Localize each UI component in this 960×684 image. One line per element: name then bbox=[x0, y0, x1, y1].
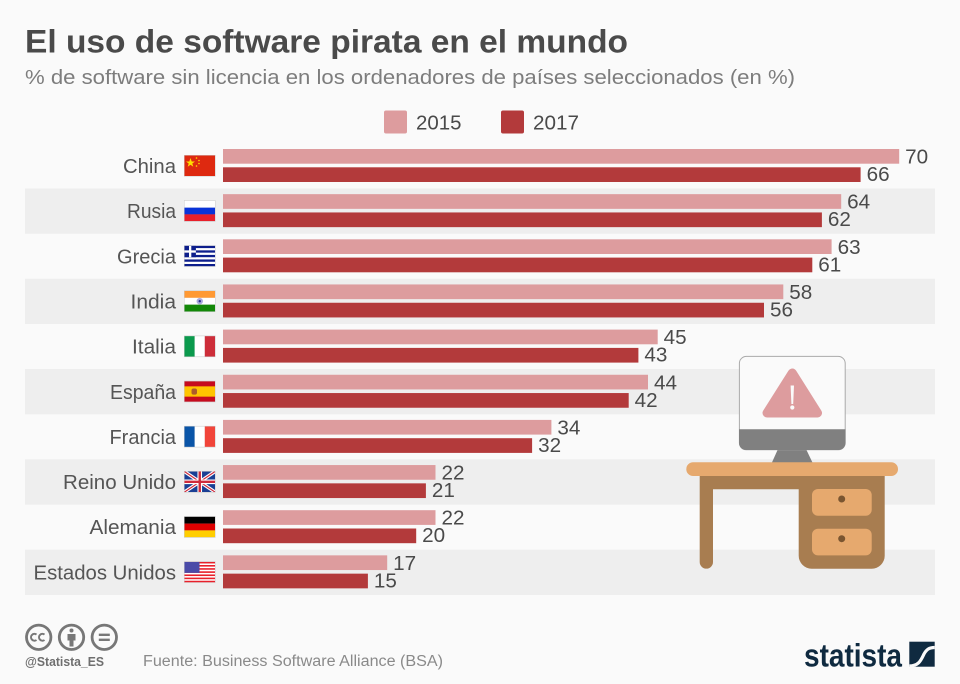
row: Italia: 43 bbox=[644, 345, 667, 367]
legend bbox=[384, 110, 579, 134]
row: India bbox=[25, 279, 935, 324]
row: Italia: 45 bbox=[664, 327, 687, 349]
row: Francia: 32 bbox=[538, 435, 561, 457]
row: Estados Unidos: 17 bbox=[393, 553, 416, 575]
row: Francia: Francia bbox=[110, 427, 177, 449]
legend: 2017 bbox=[533, 112, 579, 134]
row: Rusia bbox=[25, 188, 935, 234]
row: Italia: Italia bbox=[132, 337, 177, 359]
desk body bbox=[700, 476, 885, 569]
row: Grecia: 63 bbox=[838, 237, 861, 259]
row: India: 56 bbox=[770, 299, 793, 321]
row: Estados Unidos: Estados Unidos bbox=[34, 562, 176, 584]
drawer: lower bbox=[812, 529, 872, 555]
row: España: 44 bbox=[654, 372, 677, 394]
row: Francia bbox=[110, 417, 580, 457]
drawer: upper bbox=[812, 489, 872, 516]
row: Reino Unido: Reino Unido bbox=[63, 472, 176, 494]
monitor stand bbox=[772, 449, 813, 463]
row: India: 58 bbox=[789, 282, 812, 304]
row: India: India bbox=[130, 291, 177, 313]
row: Rusia: Rusia bbox=[127, 201, 177, 223]
row: Grecia: Grecia bbox=[117, 246, 177, 268]
desk top bbox=[686, 462, 898, 476]
row: Rusia: 64 bbox=[847, 192, 870, 214]
row: Francia: 34 bbox=[557, 417, 580, 439]
source: Fuente: Business Software Alliance (BSA) bbox=[143, 653, 443, 670]
title: El uso de software pirata en el mundo bbox=[25, 24, 628, 60]
handle: @Statista_ES bbox=[25, 655, 104, 669]
row: Grecia bbox=[117, 237, 861, 276]
row: China: 70 bbox=[905, 146, 928, 168]
icons: creative commons licence bbox=[26, 625, 117, 650]
legend: 2015 bbox=[416, 112, 462, 134]
row: Reino Unido: 21 bbox=[432, 480, 455, 502]
subtitle: % de software sin licencia en los ordenadores de países seleccionados (en %) bbox=[25, 66, 795, 89]
row: China bbox=[123, 146, 928, 186]
row: Rusia: 62 bbox=[828, 209, 851, 231]
row: Reino Unido bbox=[25, 459, 935, 505]
row: Alemania: 20 bbox=[422, 525, 445, 547]
row: Estados Unidos: 15 bbox=[374, 570, 397, 592]
row: Reino Unido: 22 bbox=[442, 463, 464, 485]
row: España: España bbox=[110, 382, 177, 404]
row: Alemania: Alemania bbox=[90, 517, 177, 539]
row: Alemania bbox=[90, 508, 464, 547]
illustration: desk with computer warning bbox=[686, 356, 898, 569]
row: España bbox=[25, 369, 935, 414]
row: China: China bbox=[123, 156, 177, 178]
row: Alemania: 22 bbox=[442, 508, 464, 530]
warning triangle bbox=[767, 373, 818, 413]
statista logo: statista bbox=[804, 638, 902, 674]
row: Italia bbox=[132, 327, 687, 367]
row: China: 66 bbox=[867, 164, 890, 186]
monitor bbox=[739, 356, 846, 450]
row: Estados Unidos bbox=[25, 550, 935, 595]
row: España: 42 bbox=[635, 390, 658, 412]
row: Grecia: 61 bbox=[818, 254, 841, 276]
